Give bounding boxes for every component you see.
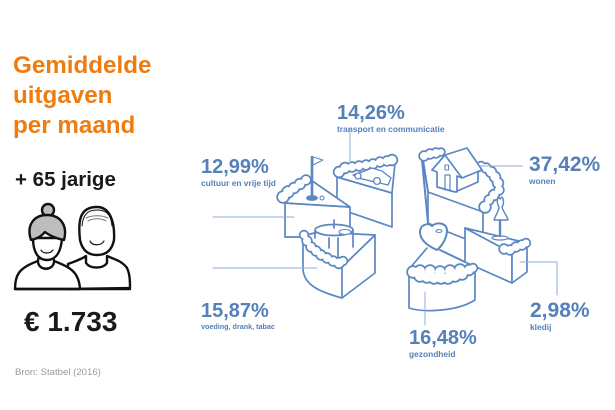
title: per maand [13, 112, 135, 139]
slice: voeding, drank, tabac [213, 220, 375, 298]
label: kledij: kledij [530, 322, 551, 332]
icon: heart [420, 223, 447, 250]
leader lines [213, 129, 557, 295]
label: cultuur en vrije tijd: cultuur en vrije tijd [201, 178, 276, 188]
label: cultuur en vrije tijd: 12,99% [201, 156, 269, 178]
label: wonen [529, 153, 600, 186]
slice: wonen [420, 148, 522, 262]
label: transport en communicatie: 14,26% [337, 102, 405, 124]
label: gezondheid [409, 327, 477, 359]
title [13, 52, 151, 139]
age group heading: + 65 jarige [15, 168, 116, 191]
slice: gezondheid [408, 223, 476, 325]
slice: transport en communicatie [334, 156, 396, 227]
label: cultuur en vrije tijd [201, 156, 276, 188]
label: voeding, drank, tabac [201, 300, 275, 331]
title: Gemiddelde [13, 52, 151, 79]
label: wonen: wonen [529, 176, 556, 186]
slice: cultuur en vrije tijd [278, 157, 350, 237]
amount: € 1.733 [24, 306, 117, 337]
label: wonen: 37,42% [529, 153, 600, 176]
slice: kledij [465, 197, 557, 283]
label: kledij [530, 299, 590, 332]
label: gezondheid: gezondheid [409, 349, 456, 359]
title: uitgaven [13, 82, 112, 109]
label: transport en communicatie [337, 102, 445, 134]
label: kledij: 2,98% [530, 299, 590, 322]
icon: house [432, 148, 482, 192]
label: voeding, drank, tabac: 15,87% [201, 300, 269, 322]
label: gezondheid: 16,48% [409, 327, 477, 349]
label: transport en communicatie: transport en communicatie [337, 124, 445, 134]
source: Bron: Statbel (2016) [15, 367, 101, 378]
icon: elderly couple [14, 202, 132, 290]
label: voeding, drank, tabac: voeding, drank, tabac [201, 322, 275, 331]
